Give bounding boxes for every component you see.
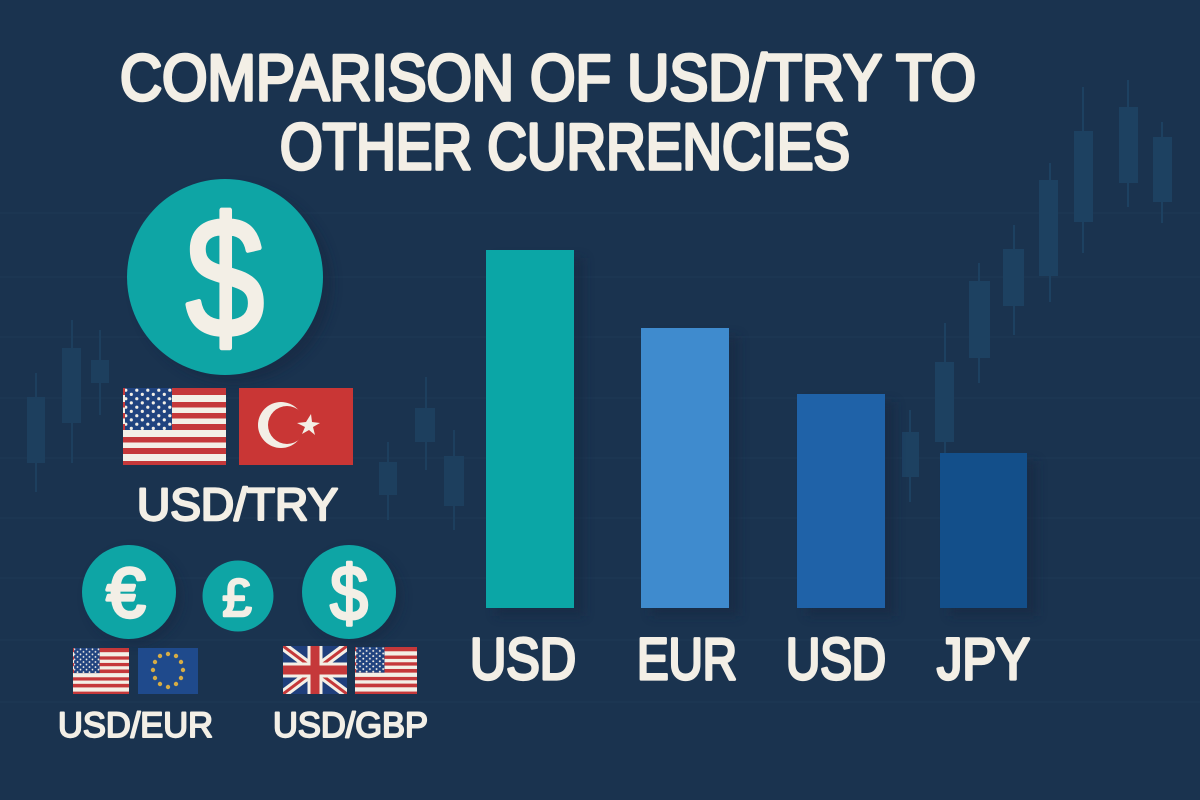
- title: OTHER CURRENCIES: [280, 110, 850, 183]
- bar: USD: USD: [470, 627, 576, 692]
- bar: EUR: [637, 328, 739, 692]
- flag: United States (large): [123, 388, 226, 465]
- flag: United States (USD/EUR): [73, 648, 129, 694]
- icon: euro coin: €: [107, 554, 145, 632]
- background candlestick chart: left: [27, 320, 464, 530]
- icon: small dollar coin: [302, 545, 402, 644]
- bar: USD: [470, 250, 584, 692]
- bar: JPY: [937, 453, 1037, 692]
- label: USD/EUR: USD/EUR: [58, 706, 213, 745]
- background candlestick chart: right: [902, 80, 1172, 502]
- icon: euro coin: [82, 545, 182, 644]
- bar chart: [470, 250, 1037, 692]
- bar: USD second: USD: [786, 627, 886, 692]
- bar: USD second: [786, 394, 895, 692]
- bar: EUR: EUR: [637, 627, 737, 692]
- icon: pound coin: [202, 560, 274, 632]
- icon: large dollar coin: [127, 179, 332, 382]
- icon: small dollar coin: $: [330, 549, 368, 637]
- flag: United Kingdom: [283, 646, 347, 694]
- flag: United States (USD/GBP): [355, 647, 417, 694]
- title: [120, 41, 976, 183]
- label: USD/TRY: USD/TRY: [137, 479, 338, 530]
- bar: JPY: JPY: [937, 627, 1030, 692]
- label: USD/GBP: USD/GBP: [273, 706, 428, 745]
- flag: European Union: [138, 648, 198, 694]
- background grid lines: [0, 213, 1200, 702]
- flag: Turkey: [239, 388, 353, 465]
- title: COMPARISON OF USD/TRY TO: [120, 41, 976, 114]
- icon: pound coin: £: [222, 569, 252, 628]
- icon: large dollar coin: $: [186, 183, 264, 373]
